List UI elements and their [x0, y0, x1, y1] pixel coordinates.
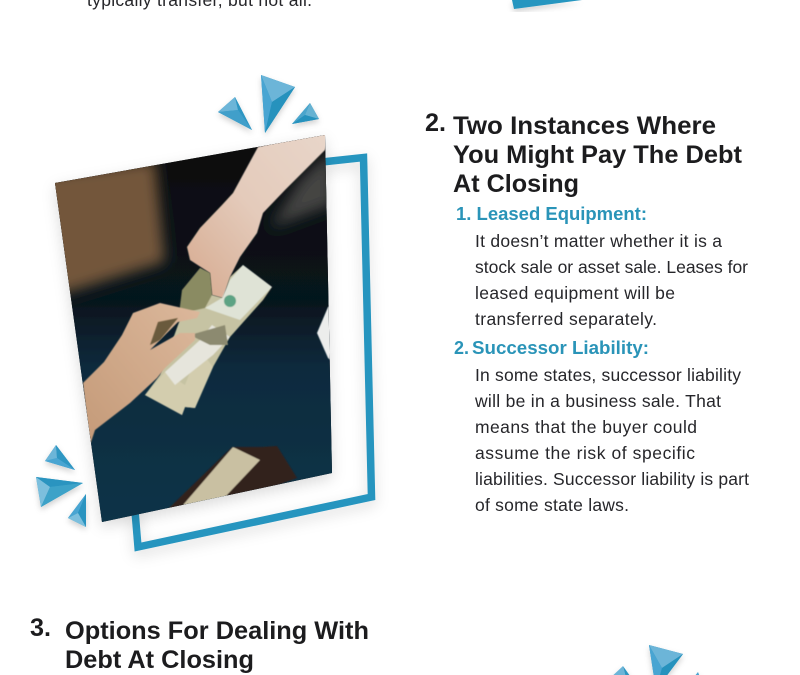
section 2 number: 2. — [425, 109, 446, 137]
text: successor liability body: In some states, successor liability — [475, 365, 741, 385]
subheading: successor liability: 2. — [454, 337, 469, 358]
section 2 heading: You Might Pay The Debt — [453, 141, 743, 169]
subheading: leased equipment: 1. Leased Equipment: — [456, 203, 647, 224]
text: successor liability body: liabilities. Successor liability is part — [475, 469, 749, 489]
section 2 heading: At Closing — [453, 170, 579, 198]
text: successor liability body: means that the buyer could — [475, 417, 697, 437]
section 2 heading: Two Instances Where — [453, 112, 716, 140]
text: successor liability body — [474, 365, 749, 515]
image frame: blue outline — [134, 158, 372, 547]
photo background — [55, 135, 332, 522]
icon: triangle burst bottom-left — [36, 445, 86, 527]
photo: grey top-right — [270, 150, 332, 228]
text: successor liability body: will be in a business sale. That — [474, 391, 721, 411]
section 3 heading — [65, 617, 369, 674]
photo: lower hand — [83, 303, 200, 445]
photo: wallet — [167, 446, 297, 510]
text: leased equipment body: It doesn’t matter whether it is a — [475, 231, 722, 251]
photo: white blur right — [316, 306, 330, 361]
text: successor liability body: assume the risk of specific — [475, 443, 695, 463]
subheading: successor liability: Successor Liability: — [472, 337, 649, 358]
icon: triangle burst bottom-right — [608, 645, 702, 675]
icon: triangle burst top — [218, 75, 319, 133]
photo: hands exchanging money — [40, 130, 340, 530]
text: leased equipment body: transferred separately. — [475, 309, 657, 329]
photo: banknotes — [145, 265, 272, 415]
photo: brown blurred shape — [40, 160, 165, 300]
text: leased equipment body — [475, 231, 748, 329]
section 2 heading — [453, 112, 743, 198]
section 3 number: 3. — [30, 614, 51, 642]
section 3 heading: Debt At Closing — [65, 646, 254, 674]
section 3 heading: Options For Dealing With — [65, 617, 369, 645]
text: leased equipment body: stock sale or asset sale. Leases for — [475, 257, 748, 277]
photo: upper hand — [187, 130, 330, 298]
icon: triangle cut off at top — [512, 0, 582, 9]
text: successor liability body: of some state laws. — [475, 495, 629, 515]
text: leased equipment body: leased equipment will be — [475, 283, 675, 303]
